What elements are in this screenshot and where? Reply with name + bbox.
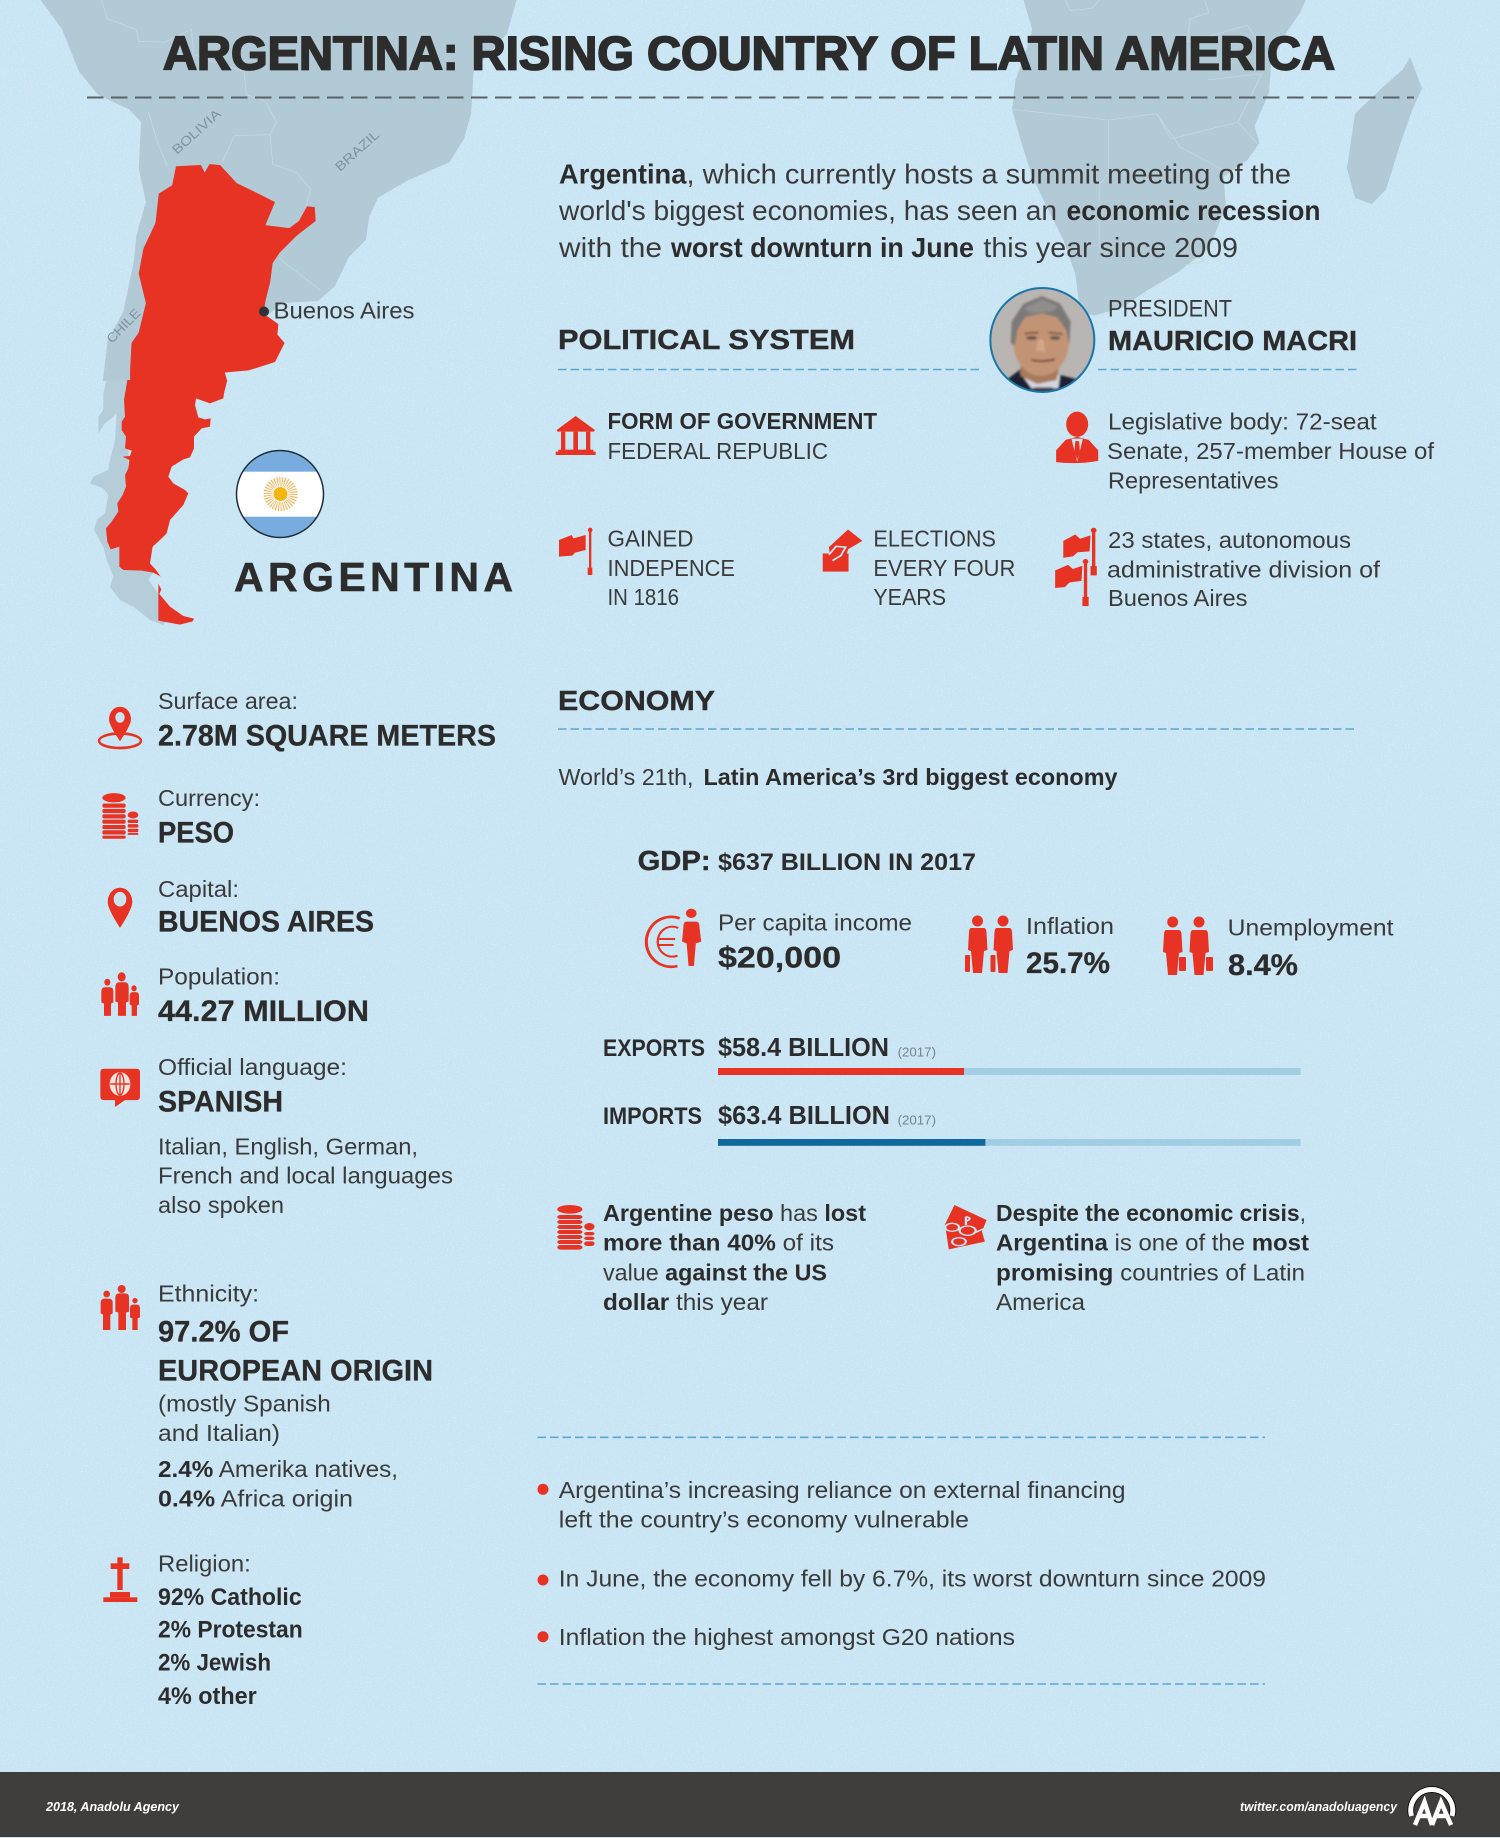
crisis note bbox=[996, 1200, 1309, 1315]
icon: language bubble bbox=[100, 1069, 140, 1107]
icon: peso coins bbox=[557, 1205, 595, 1250]
surface area bbox=[158, 688, 496, 753]
bar: exports: $58.4 BILLION bbox=[718, 1032, 889, 1062]
peso note bbox=[603, 1200, 866, 1315]
icon: Anadolu Agency logo bbox=[1411, 1789, 1453, 1825]
icon: unemployment bbox=[1163, 916, 1213, 975]
economy rank: Latin America’s 3rd biggest economy bbox=[704, 764, 1118, 790]
heading: economy: ECONOMY bbox=[558, 685, 715, 716]
GDP: GDP: bbox=[638, 845, 711, 876]
president name: MAURICIO MACRI bbox=[1108, 325, 1357, 356]
form of government bbox=[608, 408, 877, 464]
intro text: economic recession bbox=[1066, 195, 1320, 226]
intro text: this year since 2009 bbox=[983, 232, 1238, 263]
legislative body: Legislative body: 72-seat bbox=[1108, 408, 1377, 434]
crisis note: Argentina is one of the most bbox=[996, 1230, 1309, 1256]
population: Population: bbox=[158, 964, 280, 990]
states: administrative division of bbox=[1107, 556, 1381, 582]
heading: political system: POLITICAL SYSTEM bbox=[558, 324, 855, 355]
elections: ELECTIONS bbox=[873, 525, 996, 551]
GDP: $637 BILLION IN 2017 bbox=[718, 849, 976, 876]
religion: 92% Catholic bbox=[158, 1584, 302, 1611]
religion: 2% Jewish bbox=[158, 1650, 271, 1677]
bullet: June downturn: In June, the economy fell by 6.7%, its worst downturn since 2009 bbox=[559, 1566, 1266, 1592]
map: Argentina territory bbox=[106, 164, 316, 625]
ethnicity bbox=[158, 1281, 433, 1512]
map labels: BOLIVIA bbox=[169, 106, 224, 157]
icon: promising economy bbox=[945, 1205, 987, 1249]
economy rank: World’s 21th, bbox=[558, 764, 694, 790]
ethnicity: EUROPEAN ORIGIN bbox=[158, 1355, 433, 1388]
map labels: CHILE bbox=[103, 305, 144, 346]
independence bbox=[608, 525, 735, 610]
per capita income bbox=[718, 910, 912, 975]
official language: French and local languages bbox=[158, 1162, 453, 1188]
crisis note: America bbox=[996, 1289, 1085, 1315]
ethnicity: 97.2% OF bbox=[158, 1316, 289, 1349]
icon: religion cross bbox=[103, 1557, 137, 1602]
map: South America bbox=[41, 0, 517, 625]
icon: per capita income bbox=[646, 909, 701, 967]
legislative body bbox=[1107, 408, 1435, 494]
bar: imports: IMPORTS bbox=[603, 1103, 702, 1130]
footer: 2018, Anadolu Agency bbox=[45, 1799, 180, 1814]
peso note: Argentine peso has lost bbox=[603, 1200, 866, 1226]
peso note: dollar this year bbox=[603, 1289, 768, 1315]
capital: Capital: bbox=[158, 876, 239, 902]
ethnicity: Ethnicity: bbox=[158, 1281, 259, 1307]
peso note: value against the US bbox=[603, 1260, 827, 1286]
per capita income: Per capita income bbox=[718, 910, 912, 936]
country name: ARGENTINA bbox=[234, 554, 513, 600]
capital: BUENOS AIRES bbox=[158, 906, 374, 939]
currency: Currency: bbox=[158, 785, 260, 811]
legislative body: Representatives bbox=[1108, 468, 1278, 494]
independence: GAINED bbox=[608, 525, 694, 551]
peso note: more than 40% of its bbox=[603, 1230, 834, 1256]
ethnicity: 0.4% Africa origin bbox=[158, 1486, 353, 1512]
official language bbox=[158, 1054, 453, 1218]
intro text: with the bbox=[558, 232, 662, 263]
icon: capital pin bbox=[108, 888, 132, 928]
per capita income: $20,000 bbox=[718, 942, 841, 975]
legislative body: Senate, 257-member House of bbox=[1107, 438, 1435, 464]
president name: PRESIDENT bbox=[1108, 296, 1232, 322]
bar: exports bbox=[603, 1032, 1301, 1075]
portrait: Mauricio Macri bbox=[987, 287, 1097, 397]
icon: government building bbox=[556, 416, 596, 455]
bullet: inflation: Inflation the highest amongst G20 nations bbox=[559, 1624, 1015, 1650]
icon: ballot box bbox=[823, 529, 862, 572]
bar: imports: (2017) bbox=[898, 1113, 936, 1128]
ethnicity: 2.4% Amerika natives, bbox=[158, 1456, 398, 1482]
unemployment bbox=[1228, 915, 1394, 982]
independence: INDEPENCE bbox=[608, 555, 735, 581]
ethnicity: (mostly Spanish bbox=[158, 1391, 331, 1417]
bar: exports: (2017) bbox=[898, 1045, 936, 1060]
map labels: BRAZIL bbox=[332, 127, 382, 174]
intro text: , which currently hosts a summit meeting of the bbox=[686, 158, 1291, 190]
form of government: FORM OF GOVERNMENT bbox=[608, 408, 877, 434]
icon: location ring bbox=[99, 707, 141, 748]
official language: also spoken bbox=[158, 1192, 284, 1218]
inflation: Inflation bbox=[1026, 913, 1114, 939]
icon: flag bbox=[559, 528, 592, 575]
surface area: 2.78M SQUARE METERS bbox=[158, 720, 496, 753]
ethnicity: and Italian) bbox=[158, 1420, 280, 1446]
religion: 2% Protestan bbox=[158, 1617, 303, 1644]
elections: EVERY FOUR bbox=[873, 555, 1015, 581]
bar: imports bbox=[603, 1100, 1301, 1146]
map: southern Africa bbox=[1012, 0, 1422, 316]
elections: YEARS bbox=[873, 584, 946, 610]
icon: legislator bbox=[1056, 412, 1098, 463]
intro text: Argentina bbox=[559, 158, 687, 190]
crisis note: promising countries of Latin bbox=[996, 1260, 1305, 1286]
footer bbox=[0, 1772, 1500, 1837]
population: 44.27 MILLION bbox=[158, 995, 369, 1028]
religion bbox=[158, 1551, 303, 1710]
unemployment: 8.4% bbox=[1228, 949, 1298, 982]
religion: Religion: bbox=[158, 1551, 251, 1577]
currency: PESO bbox=[158, 816, 234, 850]
currency bbox=[158, 785, 260, 850]
bullet: external financing: Argentina’s increasing reliance on external financing bbox=[559, 1477, 1126, 1503]
surface area: Surface area: bbox=[158, 688, 298, 714]
president name bbox=[1108, 296, 1357, 356]
bar: imports: $63.4 BILLION bbox=[718, 1100, 890, 1130]
population bbox=[158, 964, 369, 1028]
bullet: external financing: left the country’s economy vulnerable bbox=[559, 1507, 969, 1533]
religion: 4% other bbox=[158, 1683, 257, 1710]
intro text bbox=[558, 158, 1320, 263]
states: 23 states, autonomous bbox=[1108, 527, 1351, 553]
inflation bbox=[1026, 913, 1114, 980]
key points bbox=[538, 1437, 1266, 1684]
title: ARGENTINA: RISING COUNTRY OF LATIN AMERICA bbox=[163, 26, 1335, 80]
icon: population bbox=[101, 972, 139, 1016]
independence: IN 1816 bbox=[608, 584, 679, 610]
map labels bbox=[103, 106, 382, 346]
icon: coin stack bbox=[102, 793, 138, 839]
bar: exports: EXPORTS bbox=[603, 1035, 705, 1062]
intro text: world's biggest economies, has seen an bbox=[558, 195, 1057, 226]
Buenos Aires marker: Buenos Aires bbox=[274, 298, 414, 324]
elections bbox=[873, 525, 1015, 610]
GDP bbox=[638, 845, 976, 876]
unemployment: Unemployment bbox=[1228, 915, 1394, 941]
states bbox=[1107, 527, 1381, 611]
official language: Italian, English, German, bbox=[158, 1134, 418, 1160]
form of government: FEDERAL REPUBLIC bbox=[608, 438, 828, 464]
inflation: 25.7% bbox=[1026, 947, 1110, 980]
footer: twitter.com/anadoluagency bbox=[1240, 1799, 1398, 1814]
icon: two flags bbox=[1055, 528, 1097, 606]
icon: inflation bbox=[965, 916, 1013, 973]
crisis note: Despite the economic crisis, bbox=[996, 1200, 1306, 1226]
intro text: worst downturn in June bbox=[670, 232, 974, 263]
capital bbox=[158, 876, 374, 939]
icon: Argentine flag bbox=[236, 450, 324, 539]
states: Buenos Aires bbox=[1108, 585, 1248, 611]
official language: SPANISH bbox=[158, 1086, 283, 1119]
icon: ethnicity bbox=[101, 1285, 140, 1330]
bullet: external financing bbox=[538, 1477, 1126, 1533]
official language: Official language: bbox=[158, 1054, 347, 1080]
